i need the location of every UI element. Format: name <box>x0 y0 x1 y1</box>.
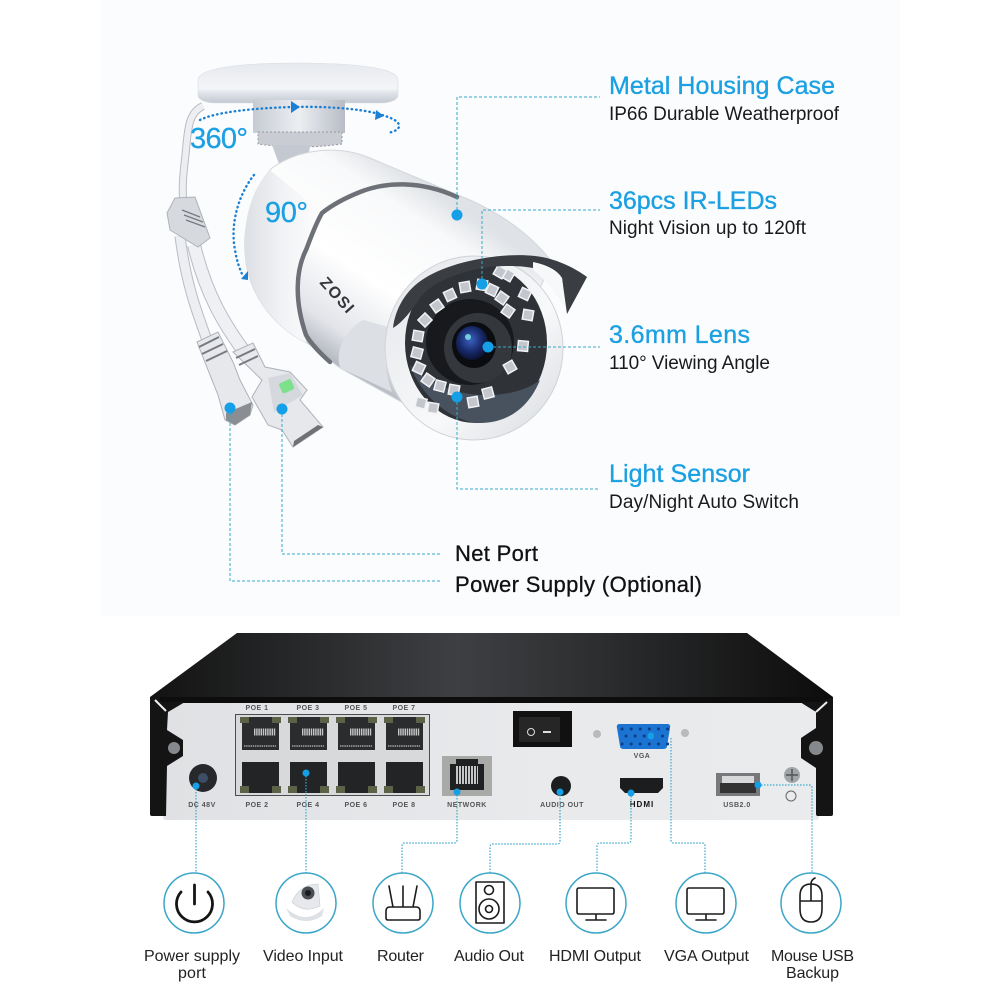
port: HDMI output <box>549 790 642 965</box>
bullet body <box>245 150 552 440</box>
network port: NETWORK <box>447 802 487 809</box>
POE block: POE 8 <box>392 802 416 809</box>
left screw <box>168 742 180 754</box>
POE block: POE 1 <box>245 705 269 712</box>
callout: light sensor <box>452 392 799 513</box>
power connector <box>197 332 253 425</box>
right ear <box>800 697 833 816</box>
port: router <box>373 788 460 965</box>
port: HDMI output: HDMI Output <box>549 948 642 965</box>
left ear highlight <box>155 700 166 711</box>
POE block: POE 2 <box>245 802 269 809</box>
callout: IR LEDs <box>476 187 807 290</box>
right screw <box>809 741 823 755</box>
port: router: Router <box>377 948 425 965</box>
port: VGA output: VGA Output <box>664 948 750 965</box>
top shadow band <box>160 697 820 703</box>
icon: mouse <box>800 878 822 922</box>
USB port: USB2.0 <box>723 802 751 809</box>
POE block <box>236 705 430 809</box>
lower housing shade <box>339 320 392 392</box>
callout: light sensor: Light Sensor <box>609 460 750 488</box>
network port <box>442 756 492 809</box>
USB port <box>716 773 760 809</box>
DC jack <box>188 764 217 809</box>
VGA port: VGA <box>634 753 650 760</box>
port: video input <box>263 770 344 965</box>
360 arc <box>200 107 399 133</box>
NVR recorder <box>150 633 833 820</box>
callout: net port <box>276 404 538 566</box>
NVR top cover <box>150 633 833 703</box>
port: mouse USB backup <box>754 782 854 982</box>
hood white flank <box>533 262 566 312</box>
callout: lens: 3.6mm Lens <box>609 321 750 349</box>
port: audio out <box>454 788 564 965</box>
body seam band <box>298 184 457 362</box>
callout: IR LEDs: Night Vision up to 120ft <box>609 218 807 239</box>
POE block: POE 6 <box>344 802 368 809</box>
360 label: 360° <box>190 123 248 155</box>
left ear <box>150 697 185 816</box>
dark interior <box>405 263 547 423</box>
360 arrowheads <box>291 101 384 120</box>
HDMI port <box>620 778 663 809</box>
port: mouse USB backup: Mouse USB <box>771 948 854 965</box>
icon: power <box>176 885 212 922</box>
port: power: Power supply <box>144 948 240 965</box>
ground screw <box>784 767 800 801</box>
port: audio out: Audio Out <box>454 948 525 965</box>
VGA port <box>593 724 689 760</box>
port: mouse USB backup: Backup <box>786 965 839 982</box>
icon: router <box>386 886 420 920</box>
90 arrowhead <box>241 271 248 280</box>
POE block: POE 4 <box>296 802 320 809</box>
port: power: port <box>178 965 207 982</box>
callout: lens <box>482 321 770 374</box>
interior lower tone <box>410 365 540 423</box>
audio jack <box>540 776 584 809</box>
icon: monitor <box>577 888 614 920</box>
callout: light sensor: Day/Night Auto Switch <box>609 492 799 513</box>
rear plate <box>163 702 819 820</box>
rear cap shade <box>245 170 322 343</box>
callout: metal housing: Metal Housing Case <box>609 72 835 100</box>
callout: metal housing: IP66 Durable Weatherproof <box>609 104 840 125</box>
icon: monitor <box>687 888 724 920</box>
lens assembly <box>426 299 514 385</box>
callout: lens: 110° Viewing Angle <box>609 353 770 374</box>
callout: metal housing <box>452 72 840 220</box>
icon: dome camera <box>286 884 324 921</box>
callout: IR LEDs: 36pcs IR-LEDs <box>609 187 777 215</box>
logo: ZOSI <box>316 274 357 317</box>
power switch <box>513 711 572 747</box>
camera illustration <box>167 63 587 447</box>
front ring <box>385 256 563 440</box>
icon: speaker <box>476 882 504 923</box>
HDMI port: HDMI <box>630 800 654 809</box>
port: video input: Video Input <box>263 948 344 965</box>
callout: net port: Net Port <box>455 541 538 566</box>
90 arc <box>234 175 254 276</box>
sun hood <box>393 255 587 328</box>
rotation arrows <box>190 101 399 280</box>
POE block: POE 5 <box>344 705 368 712</box>
DC jack: DC 48V <box>188 802 216 809</box>
POE block: POE 3 <box>296 705 320 712</box>
IR LEDs <box>411 265 534 414</box>
callout: power supply: Power Supply (Optional) <box>455 572 702 597</box>
port: power <box>144 782 240 982</box>
thin cable <box>183 106 203 198</box>
right ear highlight <box>816 702 827 712</box>
net connector <box>233 343 323 447</box>
split cables <box>180 236 243 350</box>
callout: power supply <box>224 402 702 597</box>
90 label: 90° <box>265 197 308 229</box>
ceiling mount <box>198 63 398 172</box>
port: VGA output <box>648 732 750 965</box>
cable splitter <box>167 197 210 247</box>
POE block: POE 7 <box>392 705 416 712</box>
background panel <box>101 0 900 616</box>
audio jack: AUDIO OUT <box>540 802 584 809</box>
